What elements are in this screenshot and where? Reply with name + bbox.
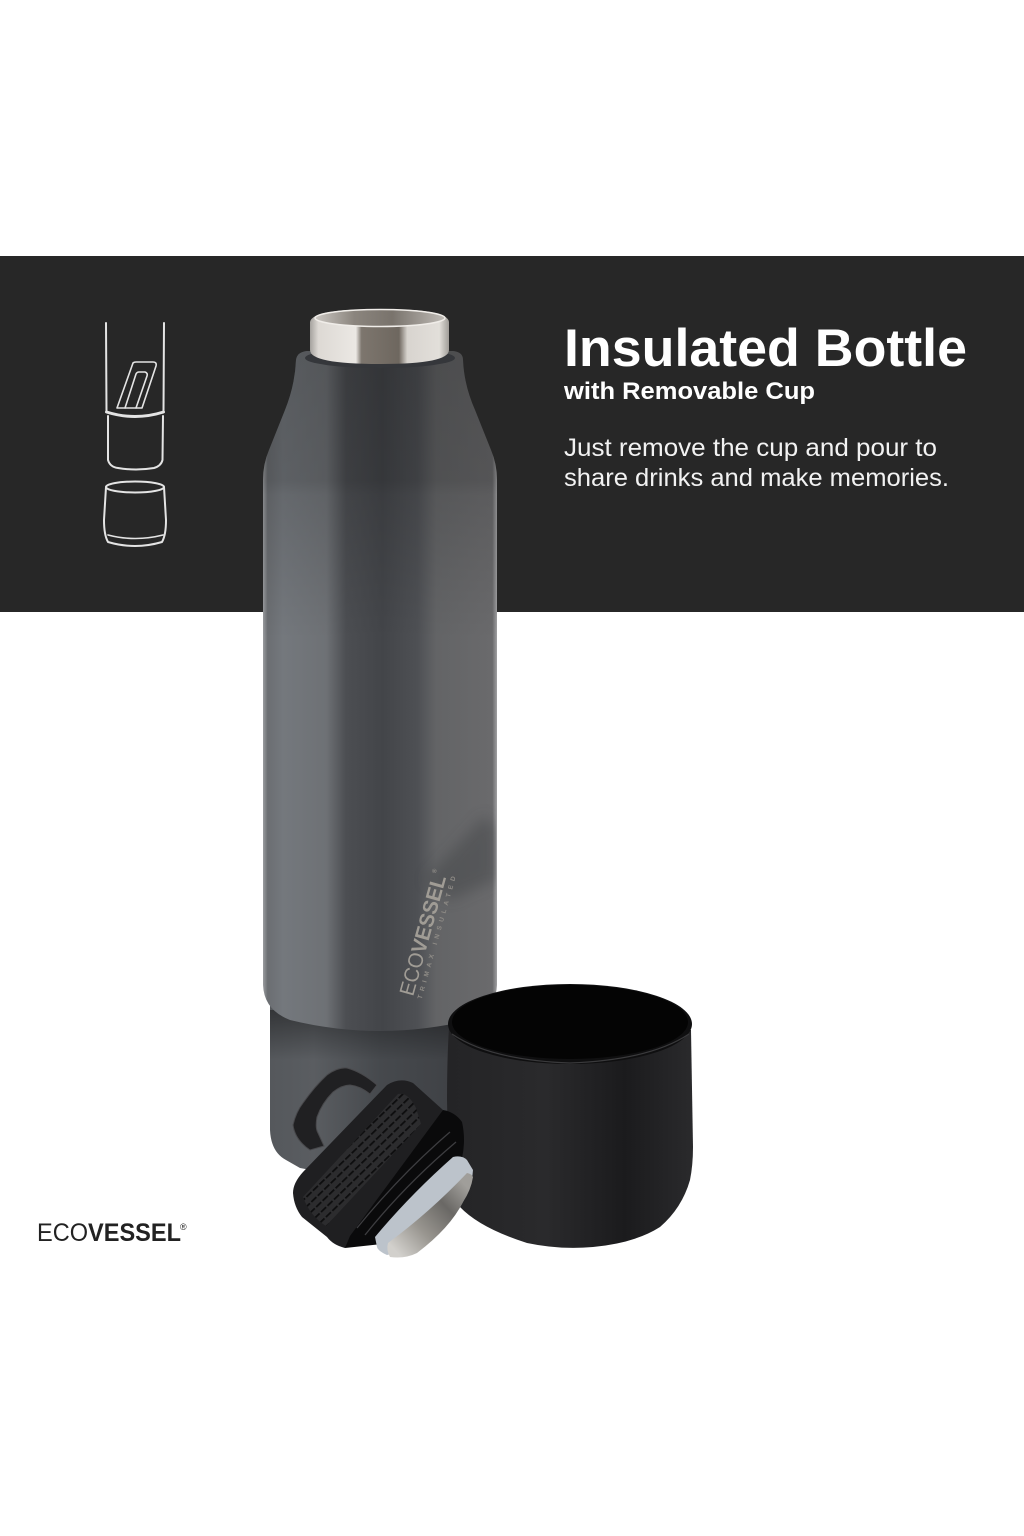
cup rim highlight (452, 1034, 689, 1063)
dark header band (0, 256, 1024, 612)
bottle main body and shoulder (263, 351, 497, 1031)
engraved logo on bottle: TRIMAX INSULATED (417, 875, 458, 1000)
engraved logo on bottle: ® (431, 867, 439, 874)
description text (564, 434, 949, 492)
description text: Just remove the cup and pour to (564, 434, 937, 462)
cup body (447, 1027, 693, 1248)
cup rim edge (448, 984, 692, 1064)
heading: Insulated Bottle (564, 319, 967, 378)
engraved logo on bottle: ECOVESSEL (396, 873, 451, 998)
removable cup (447, 984, 693, 1248)
lid grip body (293, 1080, 443, 1248)
loop handle (293, 1068, 377, 1150)
bottle (263, 309, 497, 1200)
steel neck opening (315, 310, 445, 326)
silicone gasket (375, 1156, 473, 1255)
lid with loop handle (293, 1068, 473, 1258)
bottle base section (270, 1000, 490, 1200)
grip texture (303, 1094, 421, 1226)
neck shadow (305, 348, 455, 368)
subheading: with Removable Cup (563, 378, 815, 405)
reflection near logo (432, 820, 496, 898)
brand logo: ® (180, 1222, 187, 1232)
description text: share drinks and make memories. (564, 464, 949, 492)
shadow under bottle main body (270, 1010, 490, 1060)
icon: bottle and removable cup line drawing (104, 323, 166, 546)
steel plug (387, 1173, 473, 1258)
cup interior (452, 985, 688, 1059)
brand logo: ECOVESSEL (37, 1219, 181, 1247)
steel neck (310, 309, 449, 364)
lid thread ring (345, 1110, 464, 1248)
shoulder shading (263, 351, 497, 640)
